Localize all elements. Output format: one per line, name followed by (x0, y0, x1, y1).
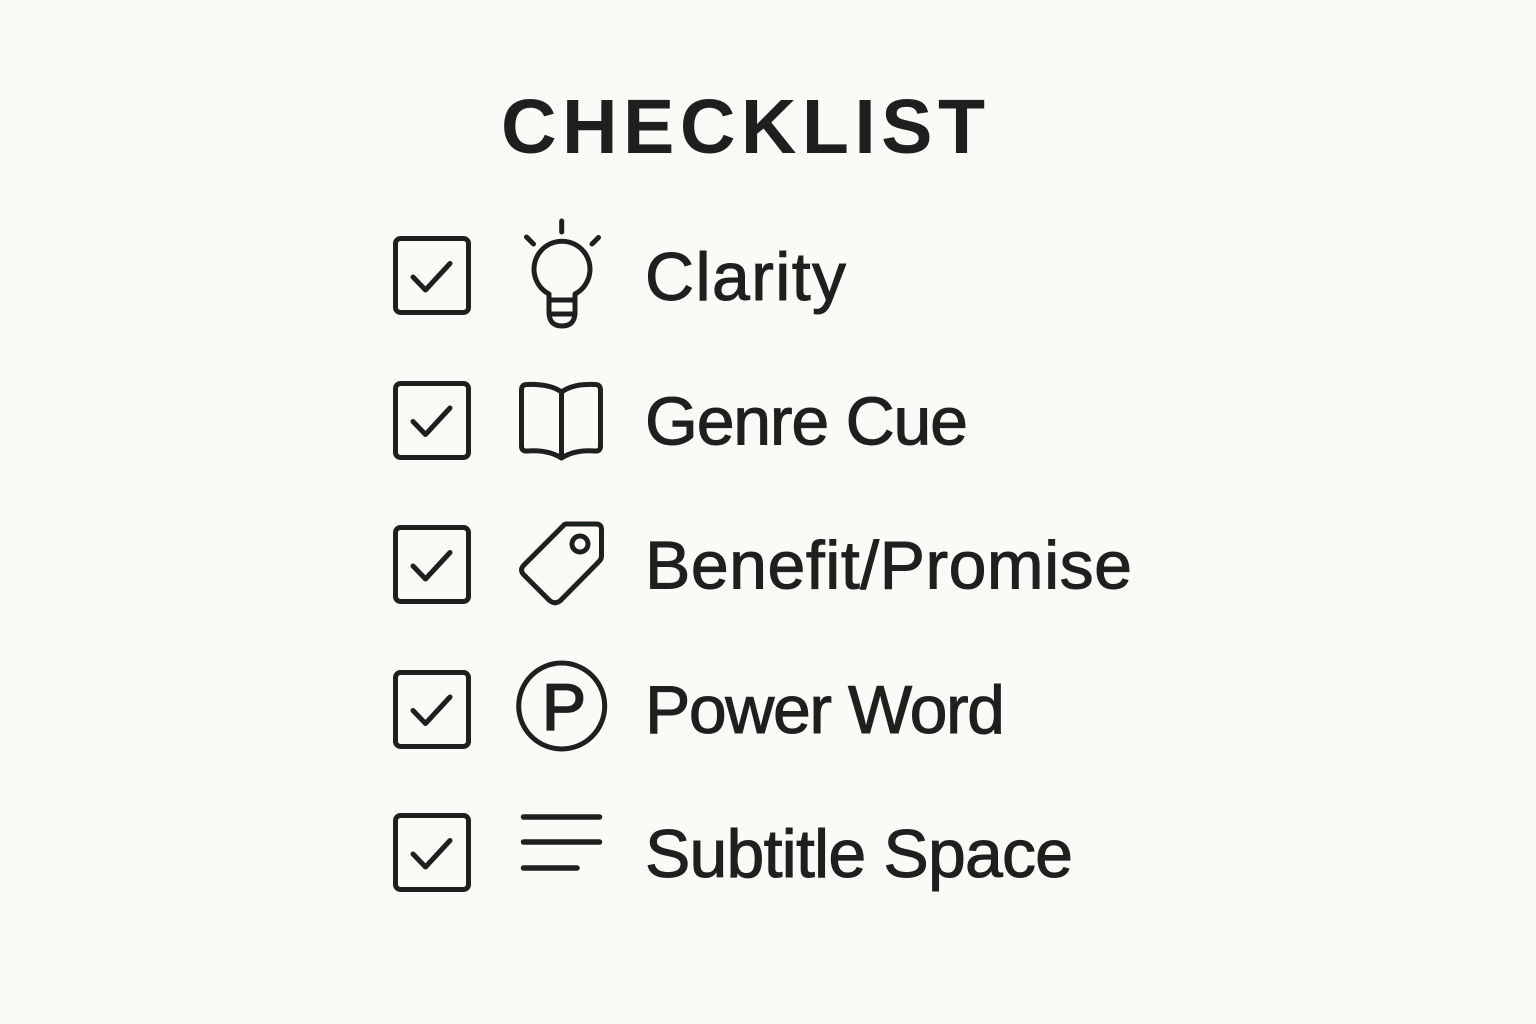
icon: circled P (519, 663, 605, 749)
title: CHECKLIST (501, 84, 985, 170)
label: Genre Cue: Genre Cue (645, 384, 968, 460)
label: Benefit/Promise: Benefit/Promise (645, 528, 1132, 604)
row: Clarity (396, 221, 846, 326)
icon: price tag (522, 524, 602, 603)
row: Benefit/Promise (396, 524, 1132, 604)
label: Subtitle Space: Subtitle Space (645, 816, 1073, 892)
label: Clarity: Clarity (645, 239, 846, 315)
checkbox: Clarity (396, 238, 468, 312)
checkbox: Power Word (396, 672, 468, 746)
checkbox: Subtitle Space (396, 816, 468, 890)
label: Power Word: Power Word (645, 672, 1005, 748)
row: Subtitle Space (396, 816, 1073, 892)
icon: text lines (524, 817, 600, 868)
icon: light bulb (526, 221, 598, 326)
row: Genre Cue (396, 384, 968, 460)
icon: open book (522, 384, 600, 458)
checkbox: Genre Cue (396, 384, 468, 458)
checkbox: Benefit/Promise (396, 528, 468, 602)
checklist (396, 221, 1132, 892)
icon: circled P: P (542, 670, 586, 744)
row: Power Word (396, 663, 1005, 749)
